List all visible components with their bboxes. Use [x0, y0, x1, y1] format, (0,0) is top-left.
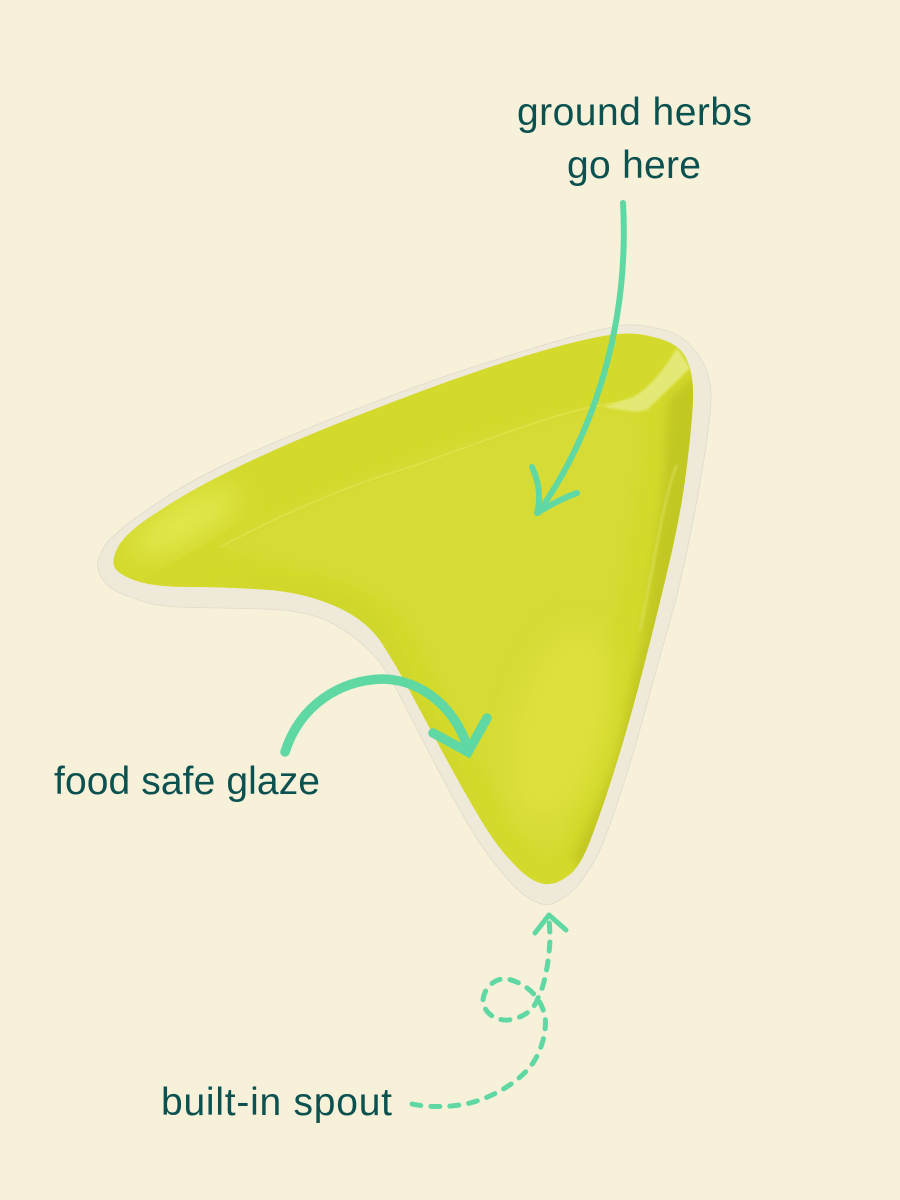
dish: [90, 310, 720, 910]
dish rim: [97, 325, 711, 904]
arrow: food safe glaze: [285, 679, 487, 752]
floor light patch: [526, 648, 612, 802]
dish glaze: [113, 334, 694, 884]
left lower wall: [240, 588, 469, 800]
arrow: built-in spout: [412, 915, 566, 1106]
right wall shade: [572, 370, 700, 870]
floor ridge line: [220, 400, 633, 547]
dish floor: [218, 406, 643, 855]
wall highlight: [640, 465, 677, 630]
left tip highlight: [130, 481, 240, 563]
corner highlight: [603, 348, 690, 412]
label: food safe glaze: food safe glaze: [54, 760, 320, 803]
label: built-in spout: built-in spout: [161, 1081, 392, 1124]
label: ground herbs: [517, 91, 752, 187]
label: ground herbs: go here: [567, 144, 701, 187]
label: ground herbs: ground herbs: [517, 91, 752, 134]
arrow: ground herbs: [532, 203, 624, 513]
